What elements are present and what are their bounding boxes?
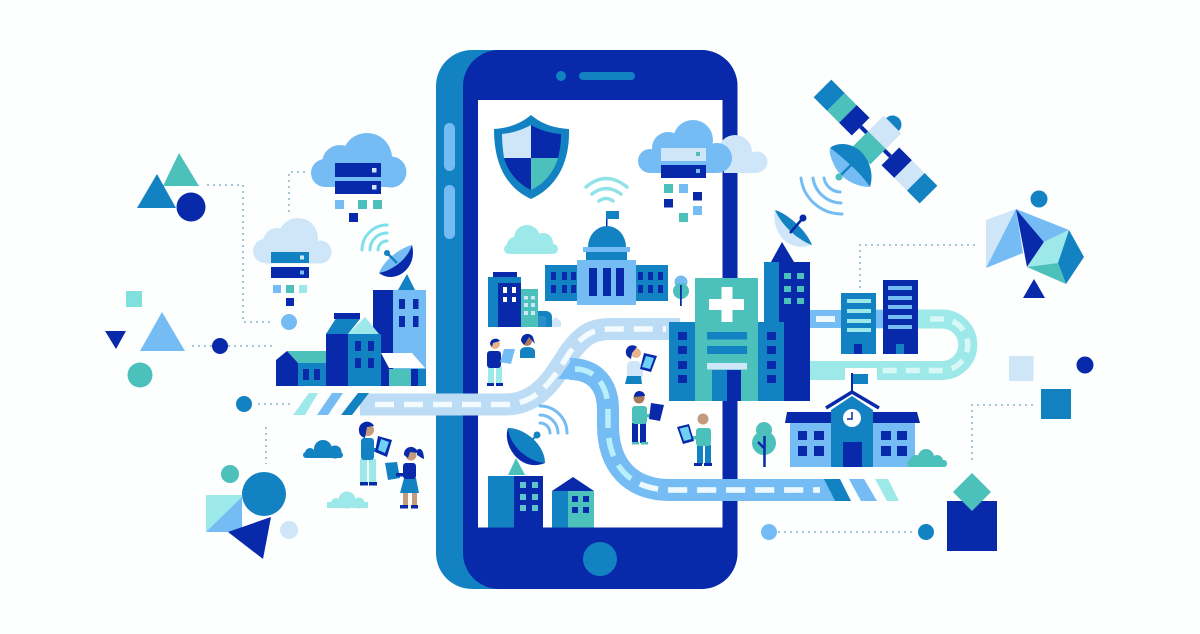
connector dot bottom right end xyxy=(918,524,934,540)
road end stripes left xyxy=(293,393,318,415)
person outside left with tablet xyxy=(359,422,392,486)
satellite dish on hospital tower xyxy=(774,210,812,247)
geometric polyhedron xyxy=(986,190,1084,298)
hospital xyxy=(669,242,810,401)
side button upper xyxy=(444,123,455,171)
signal waves left city xyxy=(362,225,387,250)
speaker xyxy=(579,72,635,80)
cloud server upper left xyxy=(311,133,406,222)
mid blue cloud xyxy=(303,440,343,458)
satellite dish in phone xyxy=(507,406,567,475)
person reading tablet 3 xyxy=(632,391,664,444)
house in phone xyxy=(552,477,594,528)
cloud server lower left xyxy=(253,218,332,306)
school xyxy=(785,373,920,467)
right office buildings xyxy=(841,280,918,354)
road end stripes right xyxy=(824,479,851,501)
signal waves from satellite xyxy=(801,178,842,214)
signal waves xyxy=(540,406,567,433)
satellite dish xyxy=(830,144,872,187)
capitol building xyxy=(545,211,668,305)
bush beside school xyxy=(907,449,947,467)
building in phone xyxy=(488,476,543,528)
smartphone xyxy=(436,50,738,589)
shapes: bottom left cluster xyxy=(206,465,298,559)
person bust xyxy=(520,334,535,358)
connector dot dark xyxy=(212,338,228,354)
camera dot xyxy=(556,71,566,81)
home button xyxy=(583,542,617,576)
shapes: right squares xyxy=(1009,356,1094,419)
icon: security shield xyxy=(494,115,569,199)
shapes: bottom right square and diamond xyxy=(947,473,997,551)
icon: wifi above capitol xyxy=(586,178,627,201)
tree beside capitol xyxy=(673,276,689,306)
girl with tablet xyxy=(385,447,424,508)
aqua cloud in phone xyxy=(504,225,558,254)
satellite xyxy=(808,65,952,209)
person reading tablet 4 xyxy=(677,414,712,466)
side button lower xyxy=(444,185,455,239)
shapes: top left triangles and circle xyxy=(137,153,206,222)
office block in phone xyxy=(488,272,561,327)
cloud server in phone xyxy=(638,120,732,222)
connector dot bottom left end xyxy=(761,524,777,540)
person with tablet 1 xyxy=(487,339,515,386)
left city skyline xyxy=(276,245,426,386)
main road xyxy=(293,329,680,415)
rooftop dish xyxy=(379,245,413,277)
connector dot mid xyxy=(236,396,252,412)
hospital cross xyxy=(709,287,744,322)
person reading tablet 2 xyxy=(625,345,657,384)
right loop road xyxy=(810,310,968,381)
tree beside school xyxy=(752,422,776,467)
shapes: mid left cluster xyxy=(105,291,185,388)
aqua cloud lower left xyxy=(327,492,368,508)
branch road xyxy=(558,358,899,501)
connector dot light xyxy=(281,314,297,330)
pale cloud behind phone edge xyxy=(718,135,768,173)
